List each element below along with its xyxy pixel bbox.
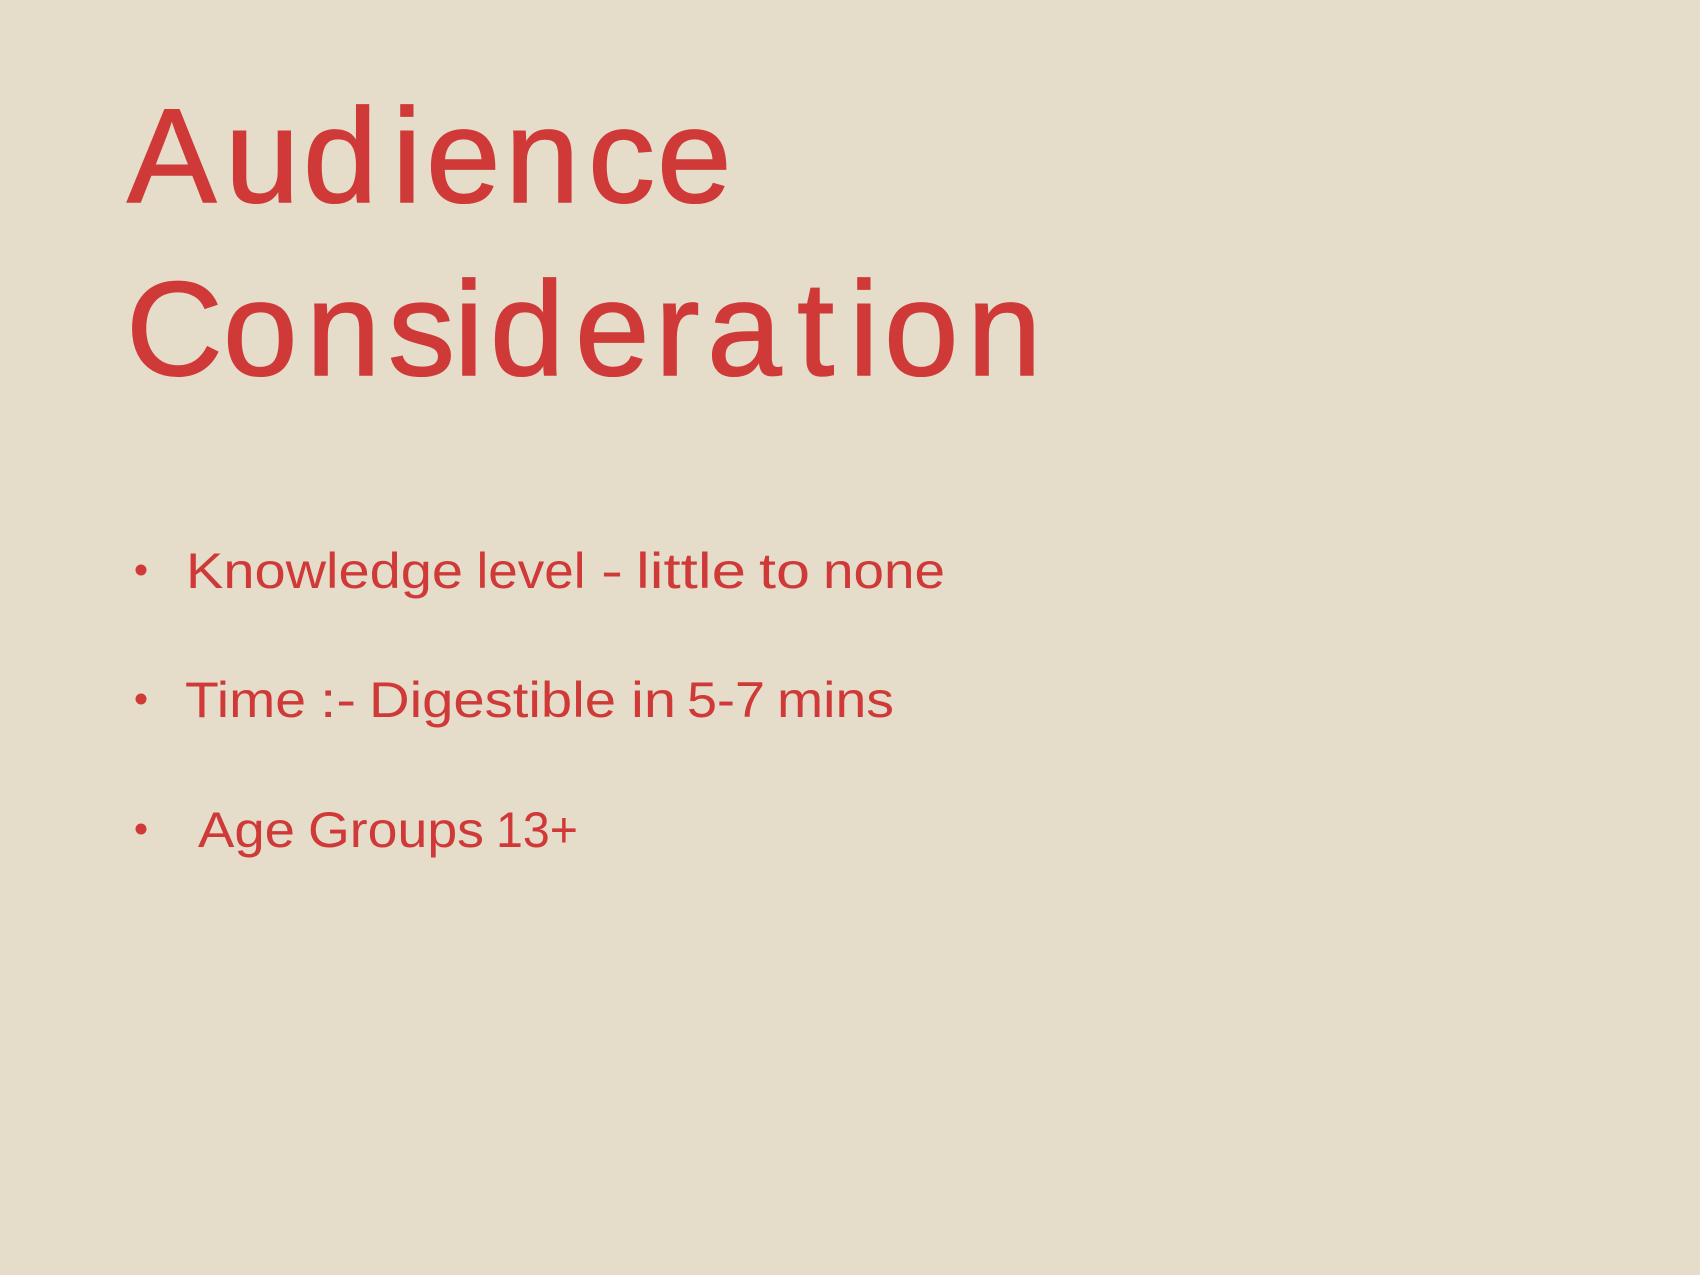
- bullet item: knowledge level: to: [759, 543, 810, 599]
- bullet item: age groups: 13+: [496, 802, 578, 858]
- bullet item: time: Digestible: [369, 672, 616, 728]
- title line: Audience: Audience: [127, 82, 732, 231]
- bullet item: time: Time: [185, 672, 306, 728]
- bullet item: time: :-: [320, 672, 356, 728]
- bullet item: time: [136, 672, 894, 728]
- bullet item: time: mins: [777, 672, 894, 728]
- bullet list: [136, 543, 945, 858]
- bullet item: age groups: Age: [198, 802, 295, 858]
- bullet item: knowledge level: Knowledge: [186, 543, 463, 599]
- bullet item: knowledge level: level: [476, 543, 586, 599]
- bullet item: knowledge level: little: [636, 543, 746, 599]
- bullet item: time: in: [631, 672, 676, 728]
- bullet item: knowledge level: -: [601, 543, 623, 599]
- bullet item: age groups: [136, 802, 578, 858]
- title: [126, 82, 1042, 404]
- bullet item: knowledge level: none: [823, 543, 945, 599]
- bullet item: knowledge level: [136, 543, 945, 599]
- title line: Consideration: Consideration: [126, 255, 1042, 404]
- bullet item: age groups: Groups: [308, 802, 484, 858]
- bullet item: time: 5-7: [687, 672, 765, 728]
